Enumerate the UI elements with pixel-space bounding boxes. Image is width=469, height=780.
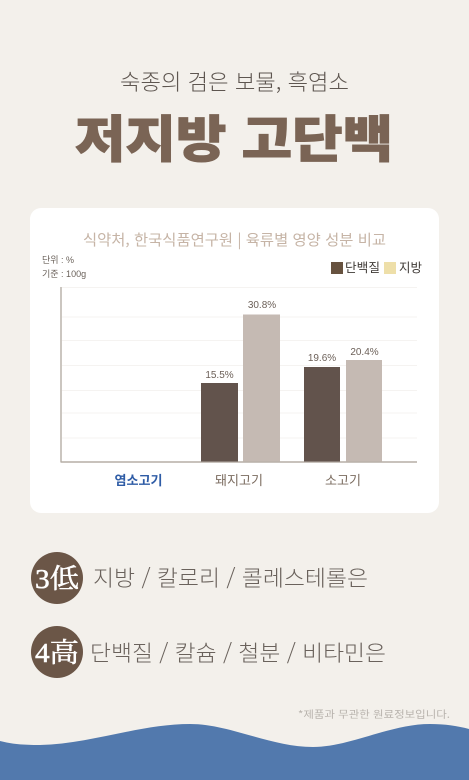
badge: 4 high bbox=[31, 626, 83, 678]
bars: pork: 15.5% bbox=[205, 370, 234, 381]
title: 저지방 고단백 bbox=[75, 100, 393, 172]
badge: 3 low bbox=[31, 552, 83, 604]
bars: beef: 20.4% bbox=[350, 347, 379, 358]
chart heading: 식약처, 한국식품연구원 | 육류별 영양 성분 비교 bbox=[83, 229, 386, 250]
category labels: 소고기 bbox=[325, 473, 361, 488]
subtitle: 숙종의 검은 보물, 흑염소 bbox=[120, 65, 349, 97]
legend bbox=[331, 261, 422, 275]
disclaimer: *제품과 무관한 원료정보입니다. bbox=[298, 706, 450, 721]
wave footer bbox=[0, 724, 469, 780]
category labels bbox=[114, 473, 361, 488]
category labels: 돼지고기 bbox=[215, 473, 263, 488]
badge: 3 low: 3低 bbox=[35, 564, 79, 594]
badge: 4 high: 4高 bbox=[35, 638, 79, 668]
bars: beef bbox=[304, 347, 382, 462]
bars: beef: 19.6% bbox=[308, 353, 336, 364]
text: four high: 단백질 / 칼슘 / 철분 / 비타민은 bbox=[90, 636, 386, 668]
bars: pork: 30.8% bbox=[248, 300, 276, 311]
unit note: 기준 : 100g bbox=[42, 269, 86, 279]
bars: pork bbox=[201, 300, 280, 462]
unit note: 단위 : % bbox=[42, 255, 74, 265]
legend: 지방 bbox=[399, 261, 422, 275]
category labels: 염소고기 bbox=[114, 473, 162, 488]
panel: nutrition comparison chart bbox=[30, 208, 439, 513]
unit note bbox=[42, 255, 86, 279]
legend: 단백질 bbox=[345, 261, 380, 275]
text: three low: 지방 / 칼로리 / 콜레스테롤은 bbox=[93, 561, 368, 593]
bar chart bbox=[60, 287, 417, 488]
